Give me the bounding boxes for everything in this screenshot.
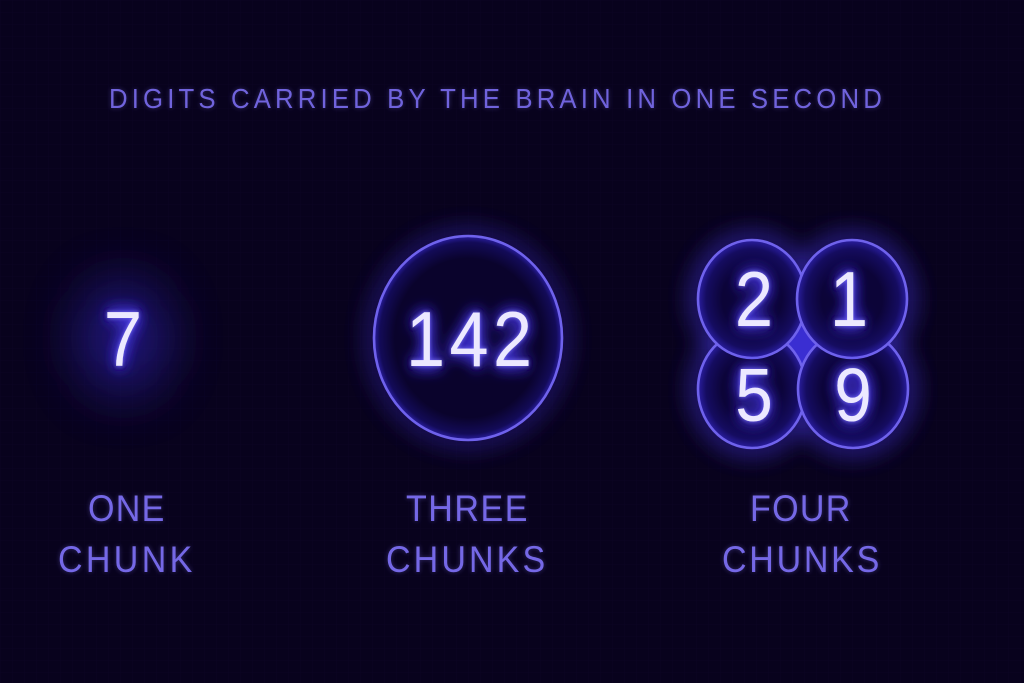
outer glow of circle group bbox=[698, 240, 908, 448]
center glow between circles bbox=[781, 322, 825, 366]
digits: 142: 142 bbox=[406, 296, 532, 383]
label: four chunks bbox=[722, 488, 879, 580]
chunk circle: 1 bbox=[797, 240, 907, 358]
chunk circle: 9 bbox=[798, 330, 908, 448]
digit: 9: 9 bbox=[834, 354, 872, 438]
label: three chunks bbox=[386, 488, 545, 580]
glow: digit seven bbox=[77, 280, 169, 396]
label: one chunk: ONE bbox=[88, 488, 164, 529]
chunk circle: 142 bbox=[374, 236, 562, 440]
label: four chunks: CHUNKS bbox=[722, 539, 879, 580]
digit: 1: 1 bbox=[830, 255, 868, 343]
panel: one chunk bbox=[58, 280, 193, 580]
label: four chunks: FOUR bbox=[750, 488, 850, 529]
digit: 5: 5 bbox=[735, 354, 773, 438]
label: one chunk bbox=[58, 488, 193, 580]
panel: three chunks bbox=[374, 236, 562, 580]
chunk circle: 5 bbox=[698, 330, 806, 448]
label: three chunks: CHUNKS bbox=[386, 539, 545, 580]
digit: 7: 7 bbox=[104, 295, 142, 383]
label: three chunks: THREE bbox=[406, 488, 527, 529]
chunk circle: 2 bbox=[698, 240, 806, 358]
title: DIGITS CARRIED BY THE BRAIN IN ONE SECOND bbox=[109, 83, 882, 114]
digit: 2: 2 bbox=[735, 255, 773, 343]
panel: four chunks bbox=[698, 240, 908, 580]
label: one chunk: CHUNK bbox=[58, 539, 193, 580]
